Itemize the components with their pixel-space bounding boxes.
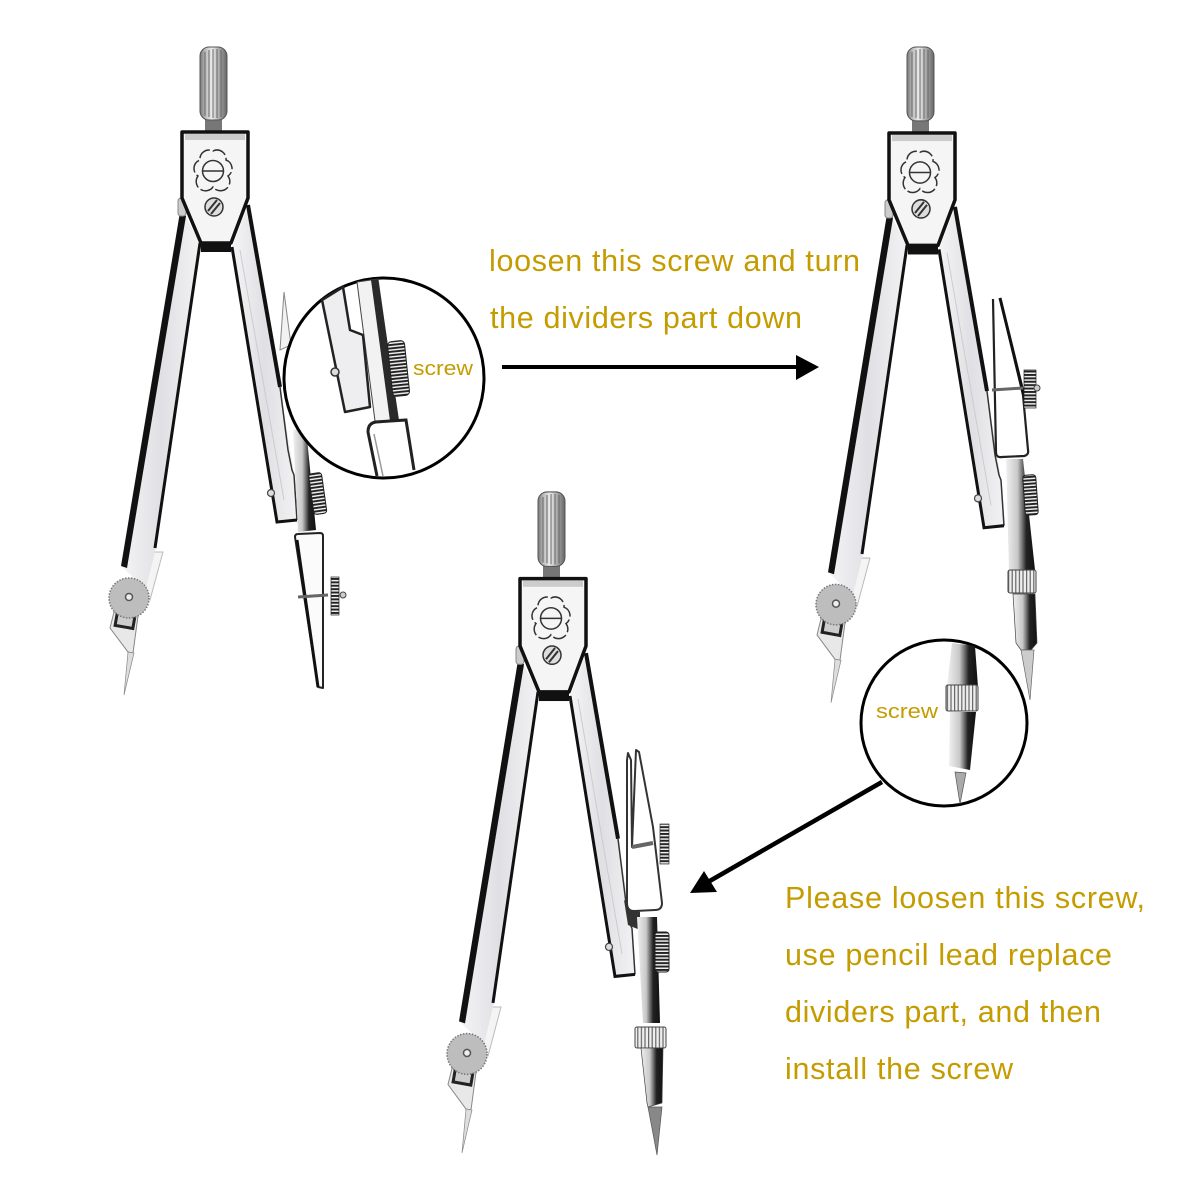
dividers needle above lens (280, 292, 291, 350)
adjusting wheel (308, 472, 327, 515)
screw label: screw (413, 358, 474, 380)
divider screw (331, 577, 339, 615)
instruction text 2: Please loosen this screw, (785, 881, 1145, 915)
collar (635, 1027, 666, 1048)
lower barrel (641, 1048, 663, 1107)
instruction text 2: dividers part, and then (785, 995, 1101, 1029)
rod (1006, 459, 1035, 570)
instruction text 2: use pencil lead replace (785, 938, 1112, 972)
arrow: step 2 to step 3 (690, 782, 882, 893)
collar (1008, 570, 1036, 593)
enlarged rod (357, 279, 398, 421)
adjusting wheel (655, 932, 669, 972)
instruction text 2 (785, 881, 1145, 1086)
dark sleeve shadow (624, 900, 640, 930)
lower barrel (1013, 594, 1037, 650)
arrow: step 1 to step 2 (502, 355, 819, 380)
divider screw (1024, 370, 1036, 408)
rod (637, 917, 660, 1023)
lens 1: screw detail (284, 278, 484, 478)
instruction text 1 (489, 244, 860, 335)
lens 2: collar screw detail (861, 640, 1027, 806)
divider screw (660, 824, 669, 864)
lead tip (1021, 650, 1034, 700)
enlarged sleeve (322, 287, 370, 412)
adjusting wheel (1023, 475, 1038, 515)
enlarged barrel (947, 643, 978, 687)
divider frame (993, 298, 1028, 457)
compass 3: pencil lead fitted (447, 492, 669, 1155)
instruction text 2: install the screw (785, 1052, 1014, 1086)
instruction text 1: loosen this screw and turn (489, 244, 860, 278)
screw label: screw (876, 701, 939, 723)
divider frame (295, 533, 323, 688)
divider frame (627, 750, 662, 911)
rod (293, 428, 316, 532)
instruction text 1: the dividers part down (490, 301, 802, 335)
lead tip (648, 1107, 662, 1155)
enlarged frame (368, 420, 414, 476)
enlarged wheel (387, 340, 410, 397)
compass 1: dividers pointing down (109, 47, 346, 695)
compass 2: dividers turned up (816, 47, 1040, 703)
